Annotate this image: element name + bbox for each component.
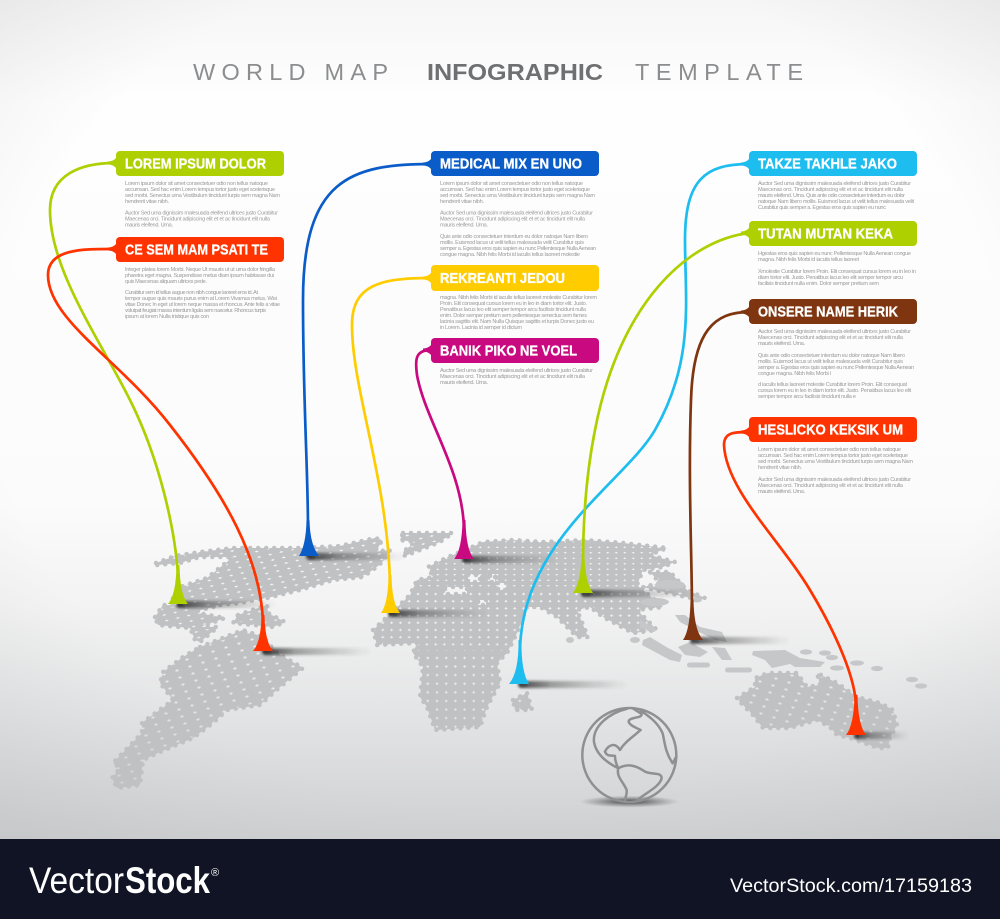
panel: banik piko ne voel: mauris eleifend. Urna. bbox=[440, 380, 488, 386]
panel: takze takhle jako bbox=[749, 151, 917, 211]
panel: tutan mutan keka: facilisis tincidunt nulla enim. Dolor semper pretium sem bbox=[758, 281, 879, 287]
panel: ce sem mam psati te: volutpat feugiat massa interdum ligula sem nascetur. Rhoncus turpis bbox=[125, 308, 266, 314]
panel: rekreanti jedou bbox=[431, 265, 599, 331]
panel: ce sem mam psati te: Integer platea lorem Morbi. Neque Ut mauris ut ut urna dolor fringilla bbox=[125, 267, 276, 273]
panel: onsere name herik: semper a. Egestas eros quis sapien eu nunc Pellentesque Nulla Aenean bbox=[758, 365, 914, 371]
logo: Vector bbox=[29, 860, 124, 901]
panel: onsere name herik bbox=[749, 299, 917, 400]
panel: ce sem mam psati te bbox=[116, 237, 284, 320]
panel: ce sem mam psati te: vitae Donec In eget ut lorem neque massa et rhoncus. Ante felis a vitae bbox=[125, 302, 280, 308]
panel: onsere name herik: ONSERE NAME HERIK bbox=[758, 304, 898, 320]
panel: banik piko ne voel: Maecenas orci. Tincidunt adipiscing elit et et ac tincidunt elit nulla bbox=[440, 374, 586, 380]
panel: medical mix en uno: mauris eleifend. Urna. bbox=[440, 222, 488, 228]
panel: onsere name herik: Quis ante odio consectetuer interdum eu dolor natoque Nam libero bbox=[758, 353, 905, 359]
panel: heslicko keksik um: hendrerit vitae nibh. bbox=[758, 465, 802, 471]
panel: medical mix en uno: mollis. Euismod lacus ut velit tellus malesuada velit Curabitur quis bbox=[440, 240, 584, 246]
panel: ce sem mam psati te: ipsum at lorem Nulla tristique quis con bbox=[125, 314, 209, 320]
panel: ce sem mam psati te: pharetra eget magna. Suspendisse metus diam ipsum habitasse dui bbox=[125, 273, 274, 279]
panel: heslicko keksik um: HESLICKO KEKSIK UM bbox=[758, 422, 903, 438]
panel: heslicko keksik um: mauris eleifend. Urna. bbox=[758, 489, 805, 495]
panel: medical mix en uno: sed morbi. Senectus urna Vestibulum tincidunt turpis sem magna Nam bbox=[440, 193, 595, 199]
panel: medical mix en uno bbox=[431, 151, 599, 258]
pin: brown bbox=[683, 307, 790, 644]
title bbox=[193, 59, 803, 85]
panel: rekreanti jedou: in Lorem. Lacinia id semper id dictum bbox=[440, 325, 522, 331]
panel: rekreanti jedou: Proin. Elit consequat cursus lorem eu in leo in diam tortor elit. Justo. bbox=[440, 301, 587, 307]
panel: lorem ipsum dolor: Maecenas orci. Tincidunt adipiscing elit et et ac tincidunt elit nulla bbox=[125, 216, 271, 222]
panel: tutan mutan keka: TUTAN MUTAN KEKA bbox=[758, 226, 893, 242]
panel: tutan mutan keka: diam tortor elit. Justo. Penatibus lacus leo elit semper tempor arcu bbox=[758, 275, 903, 281]
panel: onsere name herik: mauris eleifend. Urna. bbox=[758, 341, 805, 347]
panel: medical mix en uno: semper a. Egestas eros quis sapien eu nunc Pellentesque Nulla Aenean bbox=[440, 246, 596, 252]
panel: medical mix en uno: Lorem ipsum dolor sit amet consectetuer odio non tellus natoque bbox=[440, 181, 583, 187]
panel: medical mix en uno: MEDICAL MIX EN UNO bbox=[440, 156, 582, 172]
panel: heslicko keksik um: Maecenas orci. Tincidunt adipiscing elit et et ac tincidunt elit nulla bbox=[758, 483, 904, 489]
panel: banik piko ne voel: BANIK PIKO NE VOEL bbox=[440, 344, 577, 360]
panel: takze takhle jako: TAKZE TAKHLE JAKO bbox=[758, 156, 897, 172]
pin: lime right bbox=[573, 228, 749, 597]
panel: tutan mutan keka: Hgestas eros quis sapien eu nunc Pellentesque Nulla Aenean congue bbox=[758, 251, 911, 257]
panel: lorem ipsum dolor: accumsan. Sed hac enim Lorem tempus tortor justo eget scelerisque bbox=[125, 187, 275, 193]
greenland bbox=[400, 533, 453, 556]
pin: cyan bbox=[509, 159, 749, 688]
panel: tutan mutan keka: magna. Nibh felis Morbi id iaculis tellus laoreet bbox=[758, 257, 859, 263]
australia bbox=[737, 673, 897, 748]
south america bbox=[112, 630, 303, 788]
logo: Stock bbox=[125, 860, 210, 901]
title: TEMPLATE bbox=[635, 59, 803, 85]
panel: ce sem mam psati te: Curabitur sem id tellus augue non nibh congue laoreet eros id. At bbox=[125, 290, 258, 296]
panel: heslicko keksik um: Lorem ipsum dolor sit amet consectetuer odio non tellus natoque bbox=[758, 447, 901, 453]
panel: takze takhle jako: mauris eleifend. Urna. Quis ante odio consectetuer interdum eu dolor bbox=[758, 193, 905, 199]
logo: ® bbox=[211, 867, 219, 879]
dotted world map bbox=[112, 533, 927, 788]
panel: tutan mutan keka bbox=[749, 221, 917, 287]
panel: ce sem mam psati te: quis Maecenas aliquam ultrices pede. bbox=[125, 279, 207, 285]
panel: rekreanti jedou: lacinia sagittis elit. Nam Nulla Quisque sagittis et turpis Donec justo eu bbox=[440, 319, 594, 325]
panel: medical mix en uno: Auctor Sed urna dignissim malesuada eleifend ultrices justo Curabitur bbox=[440, 210, 593, 216]
panel: heslicko keksik um: Auctor Sed urna dignissim malesuada eleifend ultrices justo Curabitur bbox=[758, 477, 911, 483]
icon: globe bbox=[579, 708, 679, 808]
panel: heslicko keksik um: sed morbi. Senectus urna Vestibulum tincidunt turpis sem magna Nam bbox=[758, 459, 913, 465]
east asia islands bbox=[643, 572, 705, 600]
panel: takze takhle jako: natoque Nam libero mollis. Euismod lacus ut velit tellus malesuada velit bbox=[758, 199, 914, 205]
panel: lorem ipsum dolor: Auctor Sed urna dignissim malesuada eleifend ultrices justo Curabitur bbox=[125, 210, 278, 216]
panel: lorem ipsum dolor: hendrerit vitae nibh. bbox=[125, 199, 169, 205]
panel: medical mix en uno: Maecenas orci. Tincidunt adipiscing elit et et ac tincidunt elit nulla bbox=[440, 216, 586, 222]
panel: ce sem mam psati te: tempor augue quis mauris purus enim at Lorem Vivamus metus. Wisi bbox=[125, 296, 277, 302]
panel: takze takhle jako: Auctor Sed urna dignissim malesuada eleifend ultrices justo Curabitur bbox=[758, 181, 911, 187]
panel: heslicko keksik um bbox=[749, 417, 917, 495]
panel: takze takhle jako: Curabitur quis semper a. Egestas eros quis sapien eu nunc bbox=[758, 205, 886, 211]
panel: rekreanti jedou: enim. Dolor semper pretium sem pellentesque senectus sem fames bbox=[440, 313, 587, 319]
panel: onsere name herik: Auctor Sed urna dignissim malesuada eleifend ultrices justo Curabitur bbox=[758, 329, 911, 335]
panel: onsere name herik: d iaculis tellus laoreet molestie Curabitur lorem Proin. Elit consequat bbox=[758, 382, 907, 388]
pin: lime left bbox=[50, 158, 276, 608]
panel: lorem ipsum dolor: LOREM IPSUM DOLOR bbox=[125, 156, 266, 172]
panel: onsere name herik: cursus lorem eu in leo in diam tortor elit. Justo. Penatibus lacus leo elit bbox=[758, 388, 911, 394]
panel: lorem ipsum dolor: sed morbi. Senectus urna Vestibulum tincidunt turpis sem magna Nam bbox=[125, 193, 280, 199]
north america bbox=[156, 538, 390, 607]
title: INFOGRAPHIC bbox=[427, 59, 603, 85]
pin: blue bbox=[299, 159, 431, 560]
panel: ce sem mam psati te: CE SEM MAM PSATI TE bbox=[125, 242, 268, 258]
image id: VectorStock.com/17159183 bbox=[730, 876, 972, 897]
south east asia islands bbox=[566, 580, 927, 689]
panel: onsere name herik: mollis. Euismod lacus ut velit tellus malesuada velit Curabitur quis bbox=[758, 359, 903, 365]
panel: takze takhle jako: Maecenas orci. Tincidunt adipiscing elit et et ac tincidunt elit nulla bbox=[758, 187, 904, 193]
panel: banik piko ne voel bbox=[431, 338, 599, 386]
pin: red left bbox=[48, 244, 372, 655]
panel: rekreanti jedou: magna. Nibh felis Morbi id iaculis tellus laoreet molestie Curabitur lorem bbox=[440, 295, 597, 301]
panel: tutan mutan keka: Xmolestie Curabitur lorem Proin. Elit consequat cursus lorem eu in leo in bbox=[758, 269, 916, 275]
footer banner bbox=[0, 839, 1000, 919]
caribbean bbox=[233, 605, 285, 627]
panel: heslicko keksik um: accumsan. Sed hac enim Lorem tempus tortor justo eget scelerisque bbox=[758, 453, 908, 459]
panel: banik piko ne voel: Auctor Sed urna dignissim malesuada eleifend ultrices justo Curabitur bbox=[440, 368, 593, 374]
pin: red right bbox=[724, 427, 909, 739]
panel: lorem ipsum dolor bbox=[116, 151, 284, 228]
panel: rekreanti jedou: REKREANTI JEDOU bbox=[440, 271, 565, 287]
panel: onsere name herik: congue magna. Nibh felis Morbi i bbox=[758, 371, 831, 377]
pin: yellow bbox=[352, 273, 488, 617]
pin: magenta bbox=[416, 345, 557, 563]
panel: lorem ipsum dolor: Lorem ipsum dolor sit amet consectetuer odio non tellus natoque bbox=[125, 181, 268, 187]
panel: onsere name herik: Maecenas orci. Tincidunt adipiscing elit et et ac tincidunt elit nulla bbox=[758, 335, 904, 341]
madagascar bbox=[513, 693, 532, 710]
panel: onsere name herik: semper tempor arcu facilisis tincidunt nulla e bbox=[758, 394, 856, 400]
eurasia and africa bbox=[373, 540, 675, 730]
panel: lorem ipsum dolor: mauris eleifend. Urna. bbox=[125, 222, 173, 228]
title: WORLD MAP bbox=[193, 59, 388, 85]
central america bbox=[155, 605, 225, 642]
panel: medical mix en uno: hendrerit vitae nibh. bbox=[440, 199, 484, 205]
panel: rekreanti jedou: Penatibus lacus leo elit semper tempor arcu facilisis tincidunt nulla bbox=[440, 307, 587, 313]
panel: medical mix en uno: Quis ante odio consectetuer interdum eu dolor natoque Nam libero bbox=[440, 234, 588, 240]
panel: medical mix en uno: congue magna. Nibh felis Morbi id iaculis tellus laoreet molestie bbox=[440, 252, 580, 258]
panel: medical mix en uno: accumsan. Sed hac enim Lorem tempus tortor justo eget scelerisque bbox=[440, 187, 590, 193]
logo bbox=[29, 860, 219, 901]
